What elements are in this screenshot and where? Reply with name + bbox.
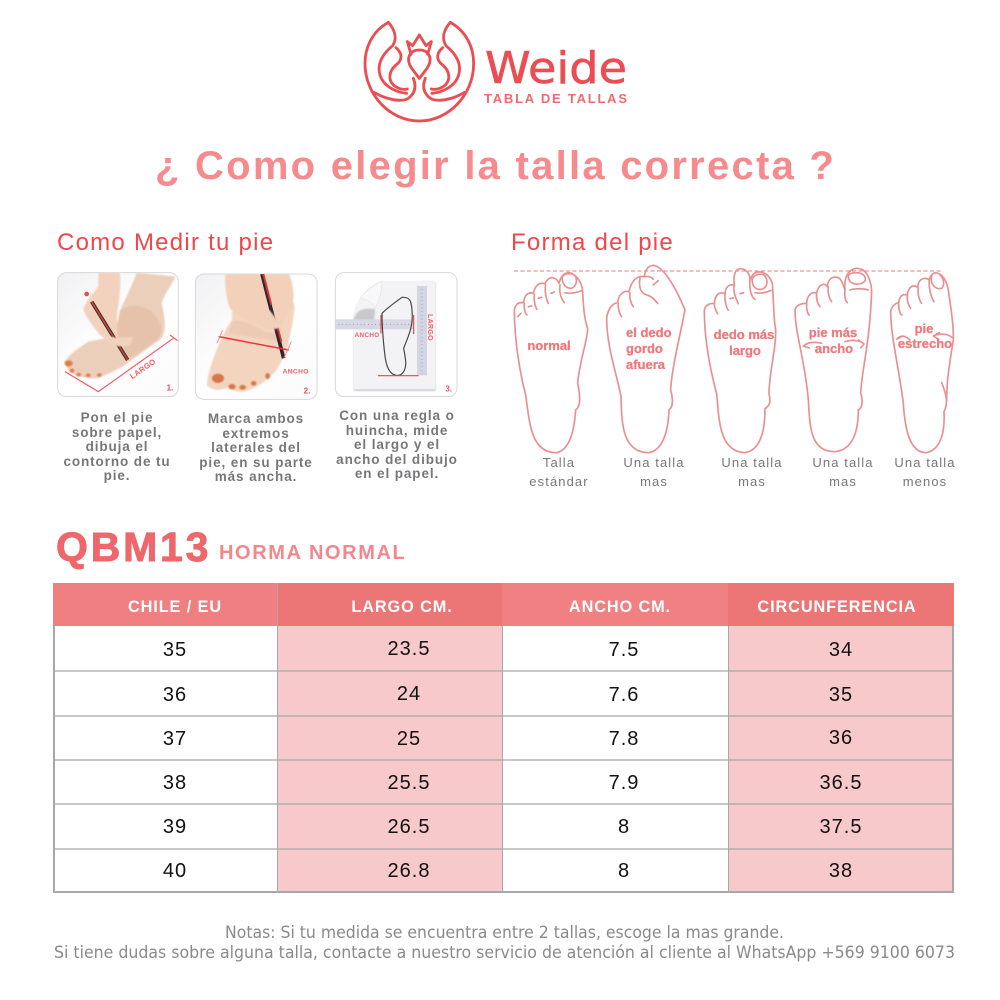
dashed reference line [514, 270, 942, 272]
label: narrow: menos [903, 474, 947, 488]
text: step 1: dibuja el [86, 439, 148, 454]
table body [53, 583, 954, 892]
label: wide: mas [829, 474, 857, 488]
photo 3: ruler on paper: LARGO [426, 314, 433, 341]
table body: 36.5 [820, 772, 862, 794]
model subtitle: HORMA NORMAL [219, 542, 406, 564]
table body: 36 [829, 727, 853, 749]
label: narrow [894, 455, 956, 488]
photo 1: tracing the foot: LARGO [128, 357, 157, 381]
table header [53, 583, 954, 626]
label: toe out: mas [640, 474, 668, 488]
table body: 35 [829, 684, 853, 706]
panel: measuring photos [57, 272, 458, 400]
photo 3: ruler on paper: ANCHO [355, 332, 380, 339]
text: step 2 [199, 411, 313, 484]
table body: 35 [163, 639, 187, 661]
table body: 26.8 [388, 860, 430, 882]
table body: 8 [618, 860, 630, 882]
label: normal: Talla [543, 455, 575, 470]
text: step 3: huincha, mide [346, 423, 448, 438]
foot: long toe [704, 269, 776, 453]
photo 2: marking width: 2. [304, 387, 310, 396]
table body: 7.9 [609, 772, 639, 794]
foot: normal [514, 273, 588, 453]
text: step 2: extremos [222, 426, 290, 441]
text: step 2: laterales del [211, 440, 301, 455]
foot: long toe: dedo más [714, 327, 774, 342]
model code: QBM13 [56, 524, 211, 570]
photo 3: ruler on paper: 3. [445, 384, 452, 393]
label: normal [529, 455, 589, 488]
table body: 39 [163, 816, 187, 838]
foot: big toe out [607, 265, 685, 453]
text: step 2: Marca ambos [208, 411, 304, 426]
table body: 37.5 [820, 816, 862, 838]
foot: wide: pie más [809, 325, 857, 340]
label: narrow: Una talla [894, 455, 956, 470]
logo subtitle: TABLA DE TALLAS [484, 91, 627, 106]
table body: 40 [163, 860, 187, 882]
table body: 7.5 [609, 639, 639, 661]
logo [364, 20, 627, 122]
foot: narrow: pie [915, 321, 933, 336]
table header: CHILE / EU [128, 598, 222, 616]
table body: 24 [397, 683, 421, 705]
foot: wide: ancho [815, 341, 853, 356]
foot: narrow [891, 273, 953, 453]
foot: long toe: largo [729, 343, 761, 358]
label: long toe [721, 455, 783, 488]
icon: swan crest [365, 22, 474, 121]
text: step 3: en el papel. [355, 466, 439, 481]
label: long toe: mas [738, 474, 766, 488]
wordmark: Weide [485, 43, 627, 94]
text: step 1: sobre papel, [72, 425, 162, 440]
table body: 25 [397, 728, 421, 750]
label: long toe: Una talla [721, 455, 783, 470]
text: step 1: pie. [104, 468, 130, 483]
model heading [56, 524, 406, 570]
text: step 1: Pon el pie [81, 410, 153, 425]
photo 2: marking width [195, 274, 317, 399]
table header: LARGO CM. [351, 598, 453, 616]
footer notes [54, 923, 955, 962]
text: step 1: contorno de tu [63, 454, 171, 469]
text: step 3 [336, 408, 458, 481]
footer notes: Notas: Si tu medida se encuentra entre 2 tallas, escoge la mas grande. [225, 923, 784, 942]
foot: big toe out: afuera [626, 357, 666, 372]
photo 1: tracing the foot [58, 273, 178, 397]
label: normal: estándar [529, 474, 589, 488]
label: wide [812, 455, 874, 488]
table body: 38 [163, 772, 187, 794]
heading: como medir: Como Medir tu pie [57, 229, 274, 256]
table body: 36 [163, 684, 187, 706]
photo 3: ruler on paper [335, 273, 457, 397]
table body: 26.5 [388, 816, 430, 838]
text: step 3: el largo y el [354, 437, 440, 452]
text: step 1 [63, 410, 171, 483]
size table [53, 583, 954, 893]
heading: forma del pie: Forma del pie [511, 229, 674, 256]
table header: ANCHO CM. [569, 598, 671, 616]
foot: wide [795, 268, 872, 452]
label: wide: Una talla [812, 455, 874, 470]
table header: CIRCUNFERENCIA [757, 598, 917, 616]
table body: 38 [829, 860, 853, 882]
photo 2: marking width: ANCHO [283, 369, 309, 376]
foot: normal: normal [527, 338, 571, 353]
text: step 3: Con una regla o [339, 408, 455, 423]
table body: 7.6 [609, 684, 639, 706]
text: step 2: pie, en su parte [199, 455, 313, 470]
label: toe out [623, 455, 685, 488]
foot: narrow: estrecho [898, 336, 952, 351]
footer notes: Si tiene dudas sobre alguna talla, contacte a nuestro servicio de atención al cliente al WhatsApp +569 9100 6073 [54, 943, 955, 962]
table body: 23.5 [388, 638, 430, 660]
title: ¿ Como elegir la talla correcta ? [155, 144, 836, 188]
table body: 8 [618, 816, 630, 838]
table body: 25.5 [388, 772, 430, 794]
text: step 2: más ancha. [215, 469, 297, 484]
foot: big toe out: gordo [626, 341, 663, 356]
photo 1: tracing the foot: 1. [167, 384, 173, 393]
table body: 34 [829, 639, 853, 661]
table body: 37 [163, 728, 187, 750]
panel: foot shapes [514, 264, 954, 454]
text: step 3: ancho del dibujo [336, 452, 458, 467]
table body: 7.8 [609, 728, 639, 750]
foot: big toe out: el dedo [626, 325, 672, 340]
label: toe out: Una talla [623, 455, 685, 470]
